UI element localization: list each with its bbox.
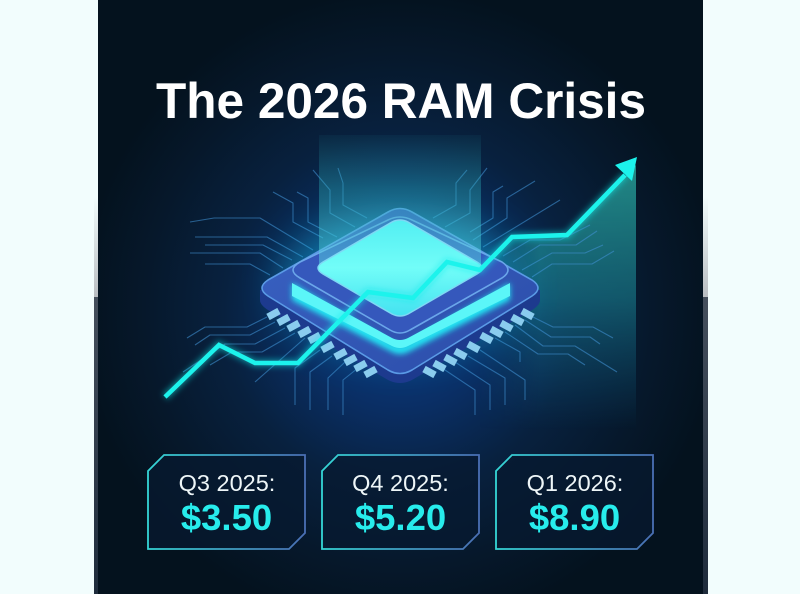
- circuit traces: [183, 168, 617, 415]
- light beam above chip: [319, 135, 481, 270]
- card: Q4 2025: [322, 455, 479, 549]
- left edge strip: [94, 197, 99, 594]
- rising trend line with arrow: [165, 157, 637, 397]
- card: Q3 2025: [148, 455, 305, 549]
- dark background panel: [98, 0, 703, 594]
- card: Q3 2025: $3.50: [181, 497, 272, 538]
- card: Q1 2026: Q1 2026:: [527, 470, 623, 496]
- chip base side: [260, 290, 540, 383]
- card: Q3 2025: Q3 2025:: [179, 470, 275, 496]
- contact pads left: [268, 311, 376, 375]
- card: Q1 2026: $8.90: [529, 497, 620, 538]
- card: Q1 2026: [496, 455, 653, 549]
- title: The 2026 RAM Crisis: [156, 73, 646, 129]
- infographic canvas: [94, 0, 708, 594]
- glow band: [292, 283, 510, 354]
- chip glow: [280, 215, 520, 355]
- right edge strip: [703, 197, 708, 594]
- glowing screen: [318, 220, 482, 316]
- microchip: [260, 135, 540, 383]
- contact pads right: [424, 311, 533, 375]
- top plate: [293, 217, 508, 333]
- shaded area under trend line: [494, 165, 636, 410]
- card: Q4 2025: Q4 2025:: [352, 470, 449, 496]
- card: Q4 2025: $5.20: [355, 497, 446, 538]
- chip base top: [262, 208, 538, 374]
